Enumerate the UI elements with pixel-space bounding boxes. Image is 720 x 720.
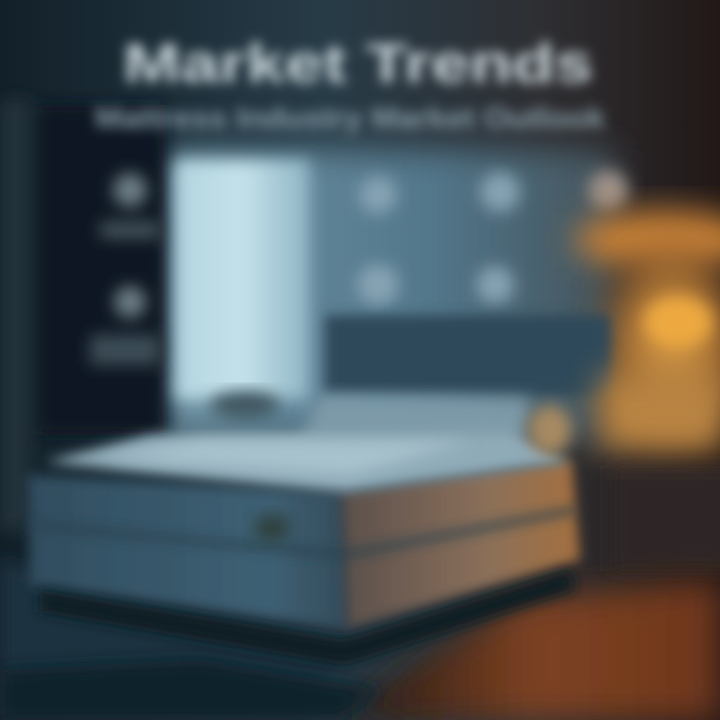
mattress shadow base [40,570,575,665]
icon: top row two [480,172,520,212]
panel: bright window [175,160,310,400]
icon: second row two [476,266,514,304]
icon: second row one [357,264,399,306]
icon: upper left [113,173,147,207]
mattress right side [342,460,580,628]
left column icons and labels [90,173,160,365]
pillows [300,395,530,440]
dark shadow on wall [210,391,280,419]
bright lamp [644,296,712,348]
lamp glow [575,210,720,455]
icon: top row one [359,176,397,214]
icon: lower left [114,286,146,318]
mattress seams [30,510,575,555]
floor: right orange [350,580,720,720]
warm reflection at bed corner [528,405,572,455]
grid of wall icons [357,170,628,306]
icon: top row three [588,170,628,210]
upper glow [575,210,720,270]
label: lower left [90,335,160,365]
lamp glow core [585,235,720,455]
floor: left teal [0,560,350,720]
lit bedside [600,375,720,450]
mattress top [45,430,570,492]
title: Market Trends [123,32,593,94]
mattress [28,430,580,665]
mattress top highlight [100,440,470,475]
panel: blue wall [165,150,615,440]
label: upper left [100,222,160,238]
right dark sofa [610,466,720,571]
panel: dark left column [0,100,166,530]
subtitle: Mattress Industry Market Outlook [95,102,605,135]
mattress label [254,514,290,542]
headboard [325,315,610,395]
mattress front side [28,475,348,628]
floor: dark bottom [0,660,380,720]
